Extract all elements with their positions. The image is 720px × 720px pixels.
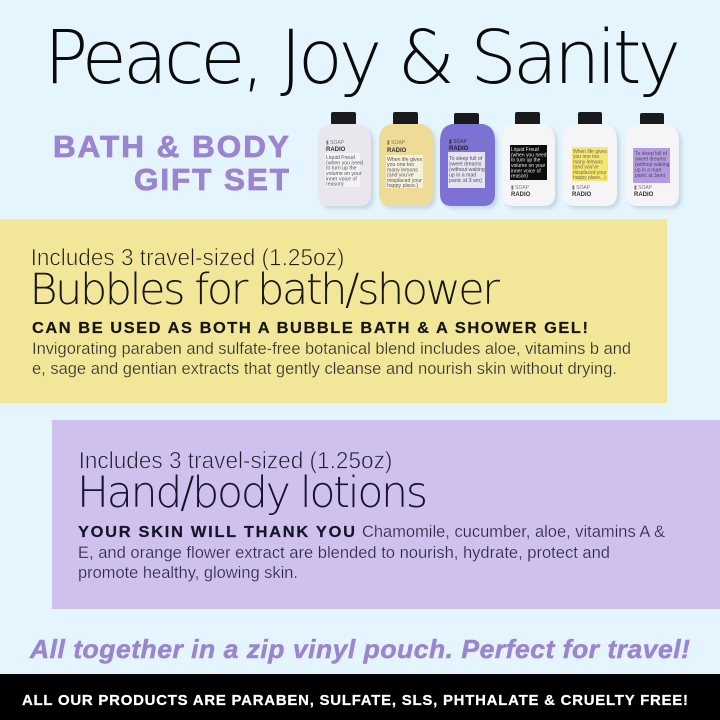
bottle: purple with white label: sweet dreams (449, 162, 482, 168)
description with bold lead-in (78, 523, 665, 582)
bottle: white with white label: volume on your (326, 171, 362, 177)
description with bold lead-in: Chamomile, cucumber, aloe, vitamins A & (362, 523, 665, 541)
product photo: six bottles (318, 112, 682, 209)
description with bold lead-in: promote healthy, glowing skin. (78, 564, 298, 582)
subtitle: bath and body gift set: GIFT SET (134, 162, 289, 197)
bottle: yellow with white label: many lemons (387, 167, 418, 173)
bottle: yellow with white label: When life gives (387, 157, 423, 163)
description text: Invigorating paraben and sulfate-free botanical blend includes aloe, vitamins b and (32, 340, 631, 358)
bottle: yellow with white label: misplaced your (387, 178, 422, 184)
bottle: purple with white label: (without waking (449, 167, 485, 173)
bottle: white with yellow label: many lemons (573, 159, 603, 165)
bottle: white with yellow label: RADIO (572, 192, 592, 198)
bottle: white with white label: reason) (326, 182, 344, 188)
bottle: white with black label: inner voice of (511, 168, 541, 174)
bottle: white with white label (318, 112, 374, 209)
bottle: white with purple label: sweet dreams (635, 156, 667, 162)
description text (32, 340, 631, 378)
bottle: purple with white label: To sleep full of (449, 156, 483, 162)
bottle: white with yellow label: happy place...) (573, 175, 606, 181)
bottle: white with white label: ▮ SOAP (326, 140, 344, 146)
bottle: white with black label (502, 112, 558, 209)
bottle: yellow with white label: ▮ SOAP (387, 140, 405, 146)
subtitle: bath and body gift set (53, 129, 289, 197)
bottle: white with yellow label: When life gives (573, 149, 607, 155)
tagline: All together in a zip vinyl pouch. Perfect for travel! (29, 634, 690, 664)
bottle: white with white label: to turn up the (326, 166, 357, 172)
bottle: purple with white label: panic at 3 am) (449, 178, 482, 184)
bottle: white with yellow label: ▮ SOAP (572, 185, 590, 191)
bottle: white with white label: RADIO (326, 147, 346, 153)
title: Peace, Joy & Sanity (44, 16, 677, 101)
bottle: white with black label: ▮ SOAP (511, 185, 529, 191)
bottle: white with yellow label (563, 112, 620, 209)
bottle: white with purple label: To sleep full of (635, 151, 668, 157)
bottle: white with black label: volume on your (511, 163, 546, 169)
bottle: yellow with white label: happy place.) (387, 183, 418, 189)
bottle: yellow with white label: RADIO (387, 148, 407, 154)
panel label: includes 3 travel-sized: Includes 3 travel-sized (1.25oz) (31, 245, 344, 271)
bottle: white with white label: inner voice of (326, 176, 357, 182)
subtitle: bath and body gift set: BATH & BODY (53, 129, 289, 164)
panel: bubbles (0, 219, 667, 403)
bottle: white with black label: Liquid Freud (511, 147, 539, 153)
bottle: white with yellow label: you one too (573, 154, 599, 160)
bottle: purple with white label: ▮ SOAP (449, 139, 467, 145)
panel heading: bubbles for bath/shower: Bubbles for bath/shower (30, 265, 500, 315)
bottle: white with white label: Liquid Freud (326, 155, 355, 161)
bottle: white with black label: (when you need (511, 152, 547, 158)
bottle: purple with white label: up in a mad (449, 172, 476, 178)
bottle: white with purple label: RADIO (634, 192, 654, 198)
bottle: white with yellow label: misplaced your (573, 170, 607, 176)
bottle: white with purple label: up in a mad (635, 168, 661, 174)
bottle: yellow with white label: you one too (387, 162, 414, 168)
panel heading: hand/body lotions: Hand/body lotions (77, 469, 426, 518)
bottle: yellow with white label: (and you've (387, 173, 414, 179)
bold claim: CAN BE USED AS BOTH A BUBBLE BATH & A SHOWER GEL! (32, 319, 588, 337)
bottle: yellow with white label (379, 112, 436, 209)
bottle: white with white label: (when you need (326, 160, 363, 166)
bottle: white with purple label: panic at 3am) (635, 173, 666, 179)
panel label: includes 3 travel-sized: Includes 3 travel-sized (1.25oz) (79, 448, 392, 474)
description with bold lead-in: YOUR SKIN WILL THANK YOU (78, 523, 355, 541)
panel: lotions (52, 420, 720, 609)
footer banner (0, 674, 720, 720)
description text: e, sage and gentian extracts that gently cleanse and nourish skin without drying. (32, 360, 617, 378)
bottle: purple with white label: RADIO (449, 146, 469, 152)
bottle: white with black label: to turn up the (511, 158, 541, 164)
bottle: white with purple label: (without waking (635, 162, 670, 168)
bottle: white with yellow label: (and you've (573, 165, 599, 171)
description with bold lead-in: E, and orange flower extract are blended to nourish, hydrate, protect and (78, 544, 610, 562)
bottle: white with purple label: ▮ SOAP (634, 185, 652, 191)
bottle: white with black label: reason) (511, 174, 528, 180)
bottle: white with purple label (626, 113, 682, 209)
bottle: white with black label: RADIO (511, 192, 531, 198)
bottle: purple with white label (440, 113, 498, 209)
footer banner: ALL OUR PRODUCTS ARE PARABEN, SULFATE, SLS, PHTHALATE & CRUELTY FREE! (22, 693, 688, 709)
